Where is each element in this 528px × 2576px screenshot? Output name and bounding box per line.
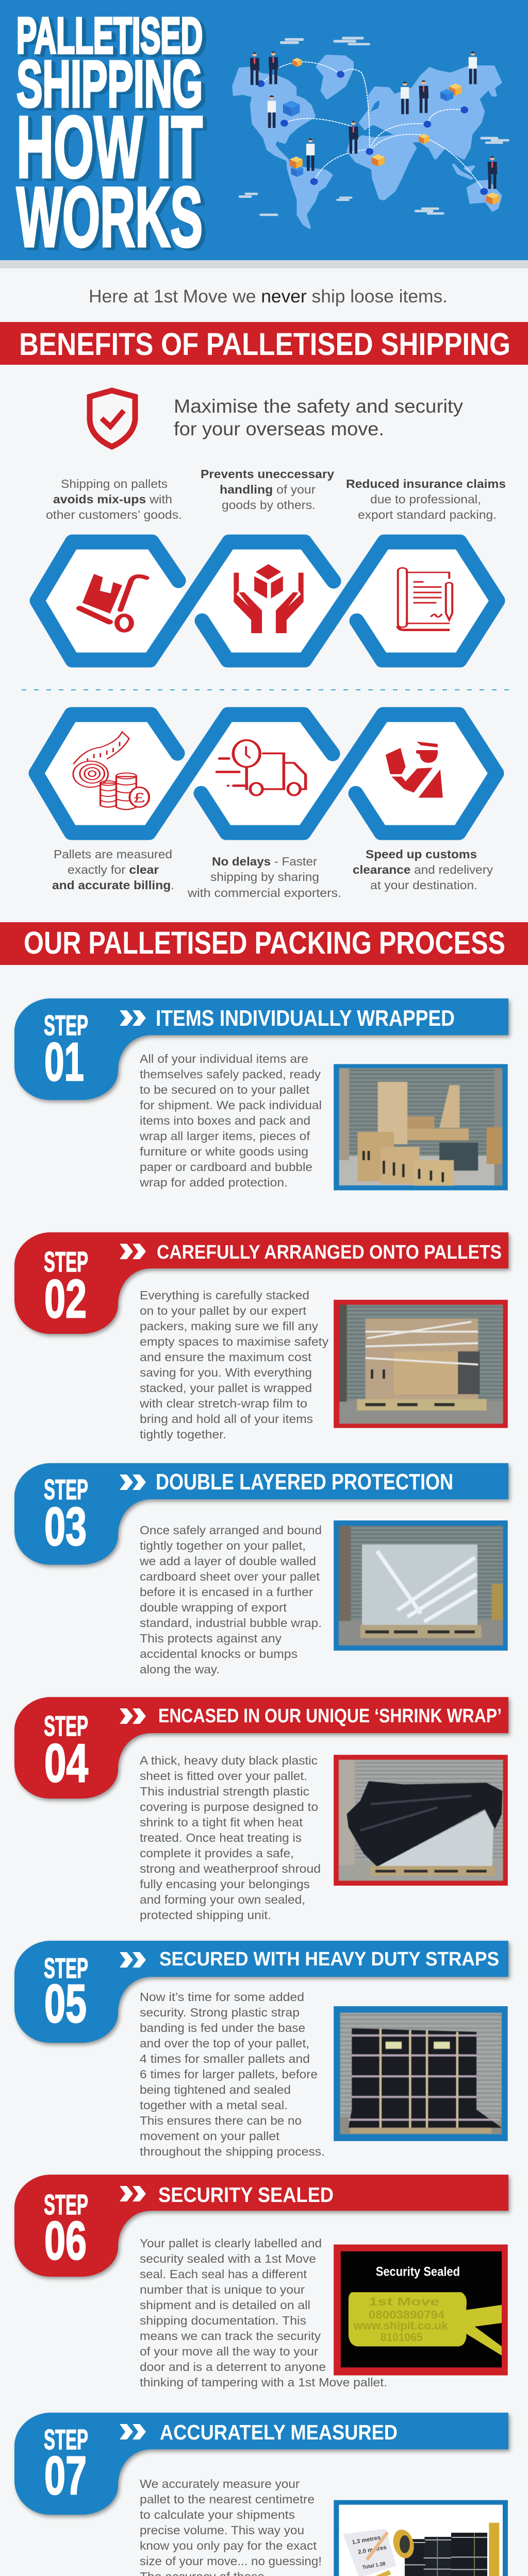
panel: step 4 [14, 1697, 508, 1922]
step 6 text: shipping documentation. This [140, 2314, 306, 2327]
step 4 badge and title bar: 04 [44, 1733, 88, 1793]
benefits tagline: for your overseas move. [174, 418, 384, 439]
photo: yellow security seal: 08003890794 [369, 2308, 444, 2321]
benefit text row 1: avoids mix-ups with [53, 493, 172, 506]
step 7 badge and title bar: ACCURATELY MEASURED [160, 2420, 398, 2444]
step 6 badge and title bar: SECURITY SEALED [158, 2183, 334, 2207]
intro line: Here at 1st Move we never ship loose items. [89, 286, 448, 307]
step 4 badge and title bar [14, 1697, 508, 1799]
icon: hands holding box [234, 564, 304, 633]
step 4 text: complete it provides a safe, [140, 1846, 294, 1860]
step 1 badge and title bar: 01 [44, 1032, 84, 1092]
step 6 text: seal. Each seal has a different [140, 2267, 307, 2281]
step 7 text: pallet to the nearest centimetre [140, 2493, 315, 2506]
step 6 text: of your move all the way to your [140, 2345, 318, 2358]
step 2 text: Everything is carefully stacked [140, 1289, 309, 1302]
benefit text row 1: Prevents uneccessary [201, 467, 334, 481]
photo: measured pallets [334, 2500, 508, 2576]
photo: yellow security seal [334, 2245, 508, 2376]
step 1 text: furniture or white goods using [140, 1145, 308, 1158]
step 5 badge and title bar: 05 [44, 1974, 87, 2034]
benefit text row 1: Shipping on pallets [61, 477, 168, 490]
step 3 text: standard, industrial bubble wrap. [140, 1616, 322, 1630]
icon: tape measure and coins: £ [134, 790, 145, 806]
step 6 text: Your pallet is clearly labelled and [140, 2236, 322, 2250]
step 5 badge and title bar: SECURED WITH HEAVY DUTY STRAPS [159, 1948, 499, 1970]
grey divider band [0, 260, 528, 268]
benefit text row 2: with commercial exporters. [187, 886, 341, 900]
step 4 text: sheet is fitted over your pallet. [140, 1769, 307, 1783]
step 1 text [139, 1052, 322, 1189]
step 6 text: shipment and is detailed on all [140, 2298, 310, 2312]
step 5 text: This ensures there can be no [140, 2114, 302, 2127]
step 7 text: We accurately measure your [140, 2477, 300, 2490]
step 5 badge and title bar [14, 1941, 508, 2043]
step 5 badge and title bar: STEP [44, 1952, 88, 1984]
step 5 text: together with a metal seal. [140, 2098, 288, 2112]
step 4 text [140, 1754, 321, 1922]
photo: pallet stretch wrapped [334, 1300, 508, 1428]
benefit text row 1: goods by others. [222, 498, 316, 512]
photo: yellow security seal: Security Sealed [376, 2265, 460, 2279]
photo: yellow security seal: 1st Move [369, 2295, 439, 2308]
step 4 text: covering is purpose designed to [140, 1800, 318, 1814]
title [16, 7, 203, 264]
step 3 badge and title bar: 03 [44, 1497, 87, 1557]
benefit text row 2: No delays - Faster [212, 855, 317, 868]
panel: step 7 [14, 2413, 508, 2576]
panel: step 2 [14, 1232, 508, 1441]
icon: tape measure and coins [73, 732, 149, 809]
step 6 text: security sealed with a 1st Move [140, 2252, 316, 2265]
header panel [0, 0, 528, 264]
step 4 text: This industrial strength plastic [140, 1785, 309, 1798]
step 3 text: tightly together on your pallet, [140, 1539, 306, 1552]
dashed divider [22, 689, 511, 690]
step 4 text: fully encasing your belongings [140, 1877, 310, 1891]
step 1 text: wrap all larger items, pieces of [139, 1129, 310, 1143]
step 3 text: cardboard sheet over your pallet [140, 1570, 320, 1583]
step 7 text: precise volume. This way you [140, 2523, 304, 2537]
icon: document and pen [398, 568, 452, 630]
photo: yellow security seal: www.shipit.co.uk [353, 2319, 448, 2332]
icon: shield with tick [90, 391, 135, 447]
icon: hand truck [80, 574, 146, 631]
step 5 text: 4 times for smaller pallets and [140, 2052, 310, 2065]
benefit text row 1: export standard packing. [358, 508, 497, 521]
photo: measured pallets: Total 1.38 [362, 2561, 386, 2571]
step 7 text: to calculate your shipments [140, 2508, 295, 2521]
step 2 text: empty spaces to maximise safety [140, 1335, 329, 1348]
step 2 text: packers, making sure we fill any [140, 1319, 319, 1333]
step 7 text: size of your move... no guessing! [140, 2554, 322, 2568]
step 4 text: strong and weatherproof shroud [140, 1862, 321, 1875]
photo: bubble wrapped pallet [334, 1520, 508, 1651]
step 3 text: accidental knocks or bumps [140, 1647, 298, 1660]
benefits tagline: Maximise the safety and security [174, 396, 464, 417]
step 3 text: double wrapping of export [140, 1601, 287, 1614]
step 7 badge and title bar: 07 [44, 2446, 87, 2506]
benefit text row 2 [52, 848, 493, 900]
benefit text row 1: Reduced insurance claims [346, 477, 506, 490]
step 1 text: All of your individual items are [140, 1052, 308, 1065]
hexagon chain row 2 [36, 715, 497, 833]
step 5 text: 6 times for larger pallets, before [140, 2067, 318, 2081]
step 6 badge and title bar: STEP [44, 2189, 88, 2221]
benefit text row 1 [46, 467, 506, 521]
step 3 text: This protects against any [140, 1632, 282, 1645]
step 3 badge and title bar: DOUBLE LAYERED PROTECTION [156, 1469, 453, 1495]
icon: delivery truck with clock [217, 740, 306, 795]
step 2 text: and ensure the maximum cost [140, 1350, 312, 1364]
benefit text row 1: other customers’ goods. [46, 508, 182, 521]
step 1 text: to be secured on to your pallet [140, 1083, 310, 1096]
step 1 badge and title bar: STEP [44, 1009, 88, 1041]
step 5 text [140, 1990, 325, 2158]
step 2 text: bring and hold all of your items [140, 1412, 313, 1426]
step 5 text: throughout the shipping process. [140, 2145, 325, 2158]
step 5 text: Now it’s time for some added [140, 1990, 304, 2004]
title: SHIPPING [16, 47, 203, 121]
benefit text row 2: Speed up customs [366, 848, 477, 861]
step 4 text: treated. Once heat treating is [140, 1831, 302, 1844]
icon: customs officer [386, 741, 443, 798]
step 1 badge and title bar: ITEMS INDIVIDUALLY WRAPPED [156, 1006, 455, 1031]
panel: step 5 [14, 1941, 508, 2158]
step 3 badge and title bar: STEP [44, 1473, 88, 1505]
panel: step 3 [14, 1463, 508, 1676]
step 2 text: tightly together. [140, 1428, 226, 1441]
step 6 text: door and is a deterrent to anyone [140, 2360, 326, 2374]
step 6 text: thinking of tampering with a 1st Move pallet. [140, 2376, 387, 2389]
benefit text row 2: clearance and redelivery [353, 863, 493, 876]
step 7 text [140, 2477, 383, 2576]
world map illustration [234, 37, 509, 228]
step 5 text: banding is fed under the base [140, 2021, 305, 2035]
step 4 text: shrink to a tight fit when heat [140, 1816, 303, 1829]
step 1 text: for shipment. We pack individual [140, 1098, 322, 1112]
step 2 text: on to your pallet by our expert [140, 1304, 307, 1317]
step 1 text: wrap for added protection. [139, 1176, 288, 1189]
step 4 text: protected shipping unit. [140, 1908, 271, 1922]
benefit text row 2: at your destination. [370, 878, 477, 892]
photo: black shrink wrap sheet [334, 1755, 508, 1886]
benefit text row 1: due to professional, [370, 493, 481, 506]
photo: strapped pallet [334, 2006, 508, 2141]
panel: step 6 [14, 2175, 508, 2389]
title: PALLETISED [16, 7, 203, 64]
benefit text row 2: shipping by sharing [210, 870, 319, 884]
step 5 text: and over the top of your pallet, [140, 2037, 309, 2050]
step 1 badge and title bar [14, 998, 508, 1100]
step 6 badge and title bar: 06 [44, 2211, 87, 2271]
step 1 text: paper or cardboard and bubble [140, 1160, 312, 1174]
benefit text row 2: and accurate billing . [52, 878, 174, 892]
hexagon chain row 1 [37, 542, 498, 660]
step 2 text: saving for you. With everything [140, 1366, 312, 1379]
photo: yellow security seal: 8101065 [381, 2330, 423, 2344]
title: WORKS [16, 170, 203, 264]
step 3 text: we add a layer of double walled [139, 1554, 316, 1568]
step 7 badge and title bar: STEP [44, 2424, 88, 2455]
step 6 text: means we can track the security [140, 2329, 321, 2343]
step 5 text: movement on your pallet [140, 2129, 280, 2143]
panel: step 1 [14, 998, 508, 1190]
step 7 badge and title bar [14, 2413, 508, 2515]
benefits tagline [174, 396, 464, 439]
step 7 text: know you only pay for the exact [140, 2539, 317, 2552]
step 1 text: themselves safely packed, ready [140, 1067, 321, 1081]
step 3 text: before it is encased in a further [140, 1585, 313, 1599]
step 3 text: along the way. [140, 1663, 220, 1676]
photo: measured pallets: 2.0 metres [357, 2545, 387, 2555]
benefit text row 2: exactly for clear [68, 863, 159, 876]
step 2 badge and title bar: 02 [44, 1269, 87, 1329]
step 5 text: security. Strong plastic strap [140, 2006, 300, 2019]
step 4 badge and title bar: STEP [44, 1710, 88, 1742]
step 4 text: and forming your own sealed, [140, 1893, 305, 1906]
step 3 badge and title bar [14, 1463, 508, 1565]
step 2 text: stacked, your pallet is wrapped [140, 1381, 312, 1395]
step 4 text: A thick, heavy duty black plastic [140, 1754, 318, 1767]
title: HOW IT [16, 98, 203, 196]
step 2 badge and title bar: STEP [44, 1246, 88, 1278]
step 3 text: Once safely arranged and bound [140, 1523, 322, 1537]
step 6 text: number that is unique to your [140, 2283, 305, 2296]
step 2 text [139, 1289, 329, 1441]
step 6 text [140, 2236, 387, 2389]
photo: packed boxes [334, 1064, 508, 1190]
step 5 text: being tightened and sealed [140, 2083, 291, 2096]
benefit text row 2: Pallets are measured [54, 848, 172, 861]
photo: measured pallets: 1.3 metres [352, 2535, 381, 2546]
step 3 text [139, 1523, 322, 1676]
benefit text row 1: handling of your [220, 483, 316, 496]
step 6 badge and title bar [14, 2175, 508, 2277]
step 2 badge and title bar [14, 1232, 508, 1334]
step 1 text: items into boxes and pack and [140, 1114, 310, 1127]
step 2 text: with clear stretch-wrap film to [139, 1397, 307, 1410]
